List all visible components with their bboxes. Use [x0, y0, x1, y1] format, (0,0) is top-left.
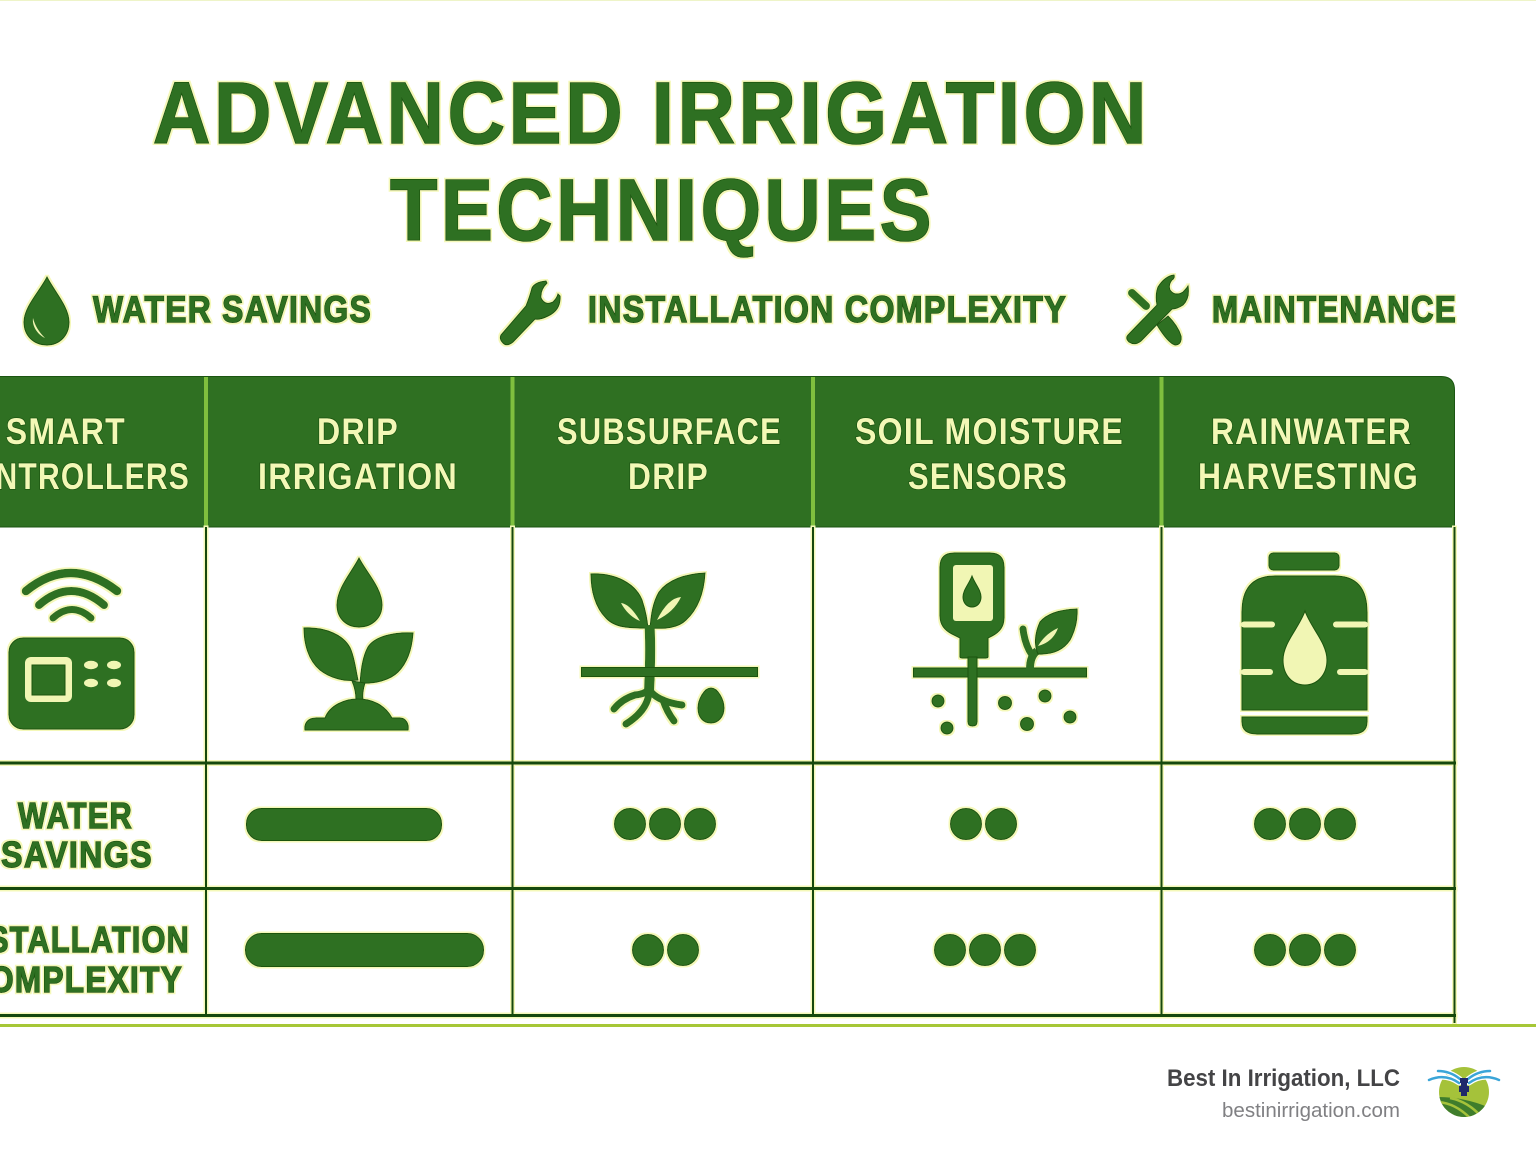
- header: soil moisture sensors: SOIL MOISTURE: [855, 411, 1124, 452]
- row: water savings: [1, 795, 1356, 875]
- table grid lines: [0, 527, 1456, 1023]
- header: soil moisture sensors: [855, 411, 1124, 497]
- icon: smart controller with wifi: [9, 573, 134, 729]
- icon: wrench: [500, 281, 560, 345]
- row: technique icons: [9, 553, 1368, 734]
- rating dots: rainwater harvesting: [1254, 808, 1356, 840]
- table header row: [0, 376, 1454, 527]
- row label: water savings: [1, 795, 153, 875]
- icon: subsurface drip plant with roots: [582, 573, 758, 724]
- header: rainwater harvesting: RAINWATER: [1211, 411, 1412, 452]
- rating dots: soil moisture sensors: [934, 934, 1036, 966]
- rating dots: soil moisture sensors: [950, 808, 1016, 840]
- legend: [24, 275, 1457, 345]
- header: rainwater harvesting: [1198, 411, 1419, 497]
- footer: [0, 1024, 1536, 1121]
- header: rainwater harvesting: HARVESTING: [1198, 456, 1419, 497]
- icon: rainwater tank: [1241, 553, 1368, 734]
- title: ADVANCED IRRIGATION: [153, 65, 1150, 162]
- rating bar: drip irrigation: [246, 934, 484, 966]
- legend label: installation complexity: INSTALLATION COMPLEXITY: [588, 289, 1067, 330]
- rating dots: subsurface drip: [614, 808, 716, 840]
- company name: Best In Irrigation, LLC: [1167, 1065, 1400, 1092]
- header: soil moisture sensors: SENSORS: [908, 456, 1068, 497]
- header: smart controllers: [0, 411, 190, 497]
- header: subsurface drip: [557, 411, 782, 497]
- header: drip irrigation: DRIP: [317, 411, 399, 452]
- website: bestinirrigation.com: [1222, 1100, 1400, 1122]
- icon: soil moisture sensor: [914, 553, 1086, 734]
- legend label: water savings: WATER SAVINGS: [93, 289, 372, 330]
- header: drip irrigation: IRRIGATION: [258, 456, 458, 497]
- comparison table: [0, 376, 1456, 1023]
- title: [153, 65, 1150, 259]
- icon: crossed tools: [1127, 275, 1188, 345]
- legend label: maintenance: MAINTENANCE: [1212, 289, 1457, 330]
- row label: installation complexity: [0, 919, 190, 1000]
- icon: water drop: [24, 277, 69, 345]
- icon: drip drop above seedling: [304, 558, 413, 730]
- icon: company logo: [1429, 1067, 1499, 1120]
- rating dots: subsurface drip: [632, 934, 698, 966]
- header: subsurface drip: DRIP: [628, 456, 709, 497]
- row label: water savings: SAVINGS: [1, 834, 153, 875]
- rating bar: drip irrigation: [246, 808, 442, 840]
- row: installation complexity: [0, 919, 1356, 1000]
- header: subsurface drip: SUBSURFACE: [557, 411, 782, 452]
- title: TECHNIQUES: [390, 162, 935, 259]
- rating dots: rainwater harvesting: [1254, 934, 1356, 966]
- row label: water savings: WATER: [18, 795, 133, 836]
- header: drip irrigation: [258, 411, 458, 497]
